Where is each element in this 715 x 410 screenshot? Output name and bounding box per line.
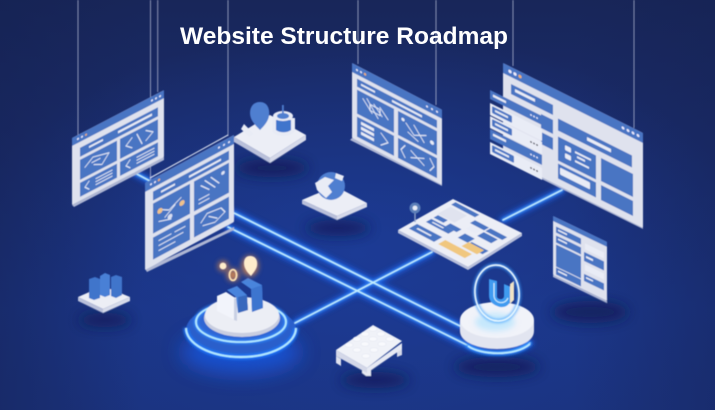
illustration	[72, 0, 643, 388]
icon: keypad block	[336, 325, 402, 376]
panel: top-left hanging wireframe	[72, 90, 164, 207]
icon platform: globe with clamp	[302, 172, 367, 220]
platform: left glowing base with blocks	[181, 256, 301, 374]
icon: small bar-chart platform	[78, 273, 130, 313]
icon: glowing halo ring	[472, 263, 522, 323]
icon: white block	[217, 292, 237, 321]
icon: U magnet	[489, 279, 514, 307]
hanging wires	[78, 0, 634, 180]
panel: front-left hanging wireframe	[145, 135, 234, 272]
glowing connector lines	[133, 172, 562, 353]
icon platform: balloon and pot	[234, 102, 306, 163]
floor shadows	[79, 159, 628, 388]
icon: tall blue block	[241, 278, 263, 312]
menu strips overlay	[490, 90, 542, 180]
panel: centre hanging wireframe	[350, 63, 442, 186]
panel: small right wireframe	[553, 216, 607, 303]
panel: large right hanging wireframe	[490, 63, 643, 229]
platform: right glowing base with ring	[460, 263, 534, 353]
title: Website Structure Roadmap	[180, 23, 508, 50]
icon: blue block	[227, 286, 248, 313]
panel: flat sitemap tablet	[398, 199, 522, 270]
icon: glowing bulbs	[218, 256, 258, 281]
